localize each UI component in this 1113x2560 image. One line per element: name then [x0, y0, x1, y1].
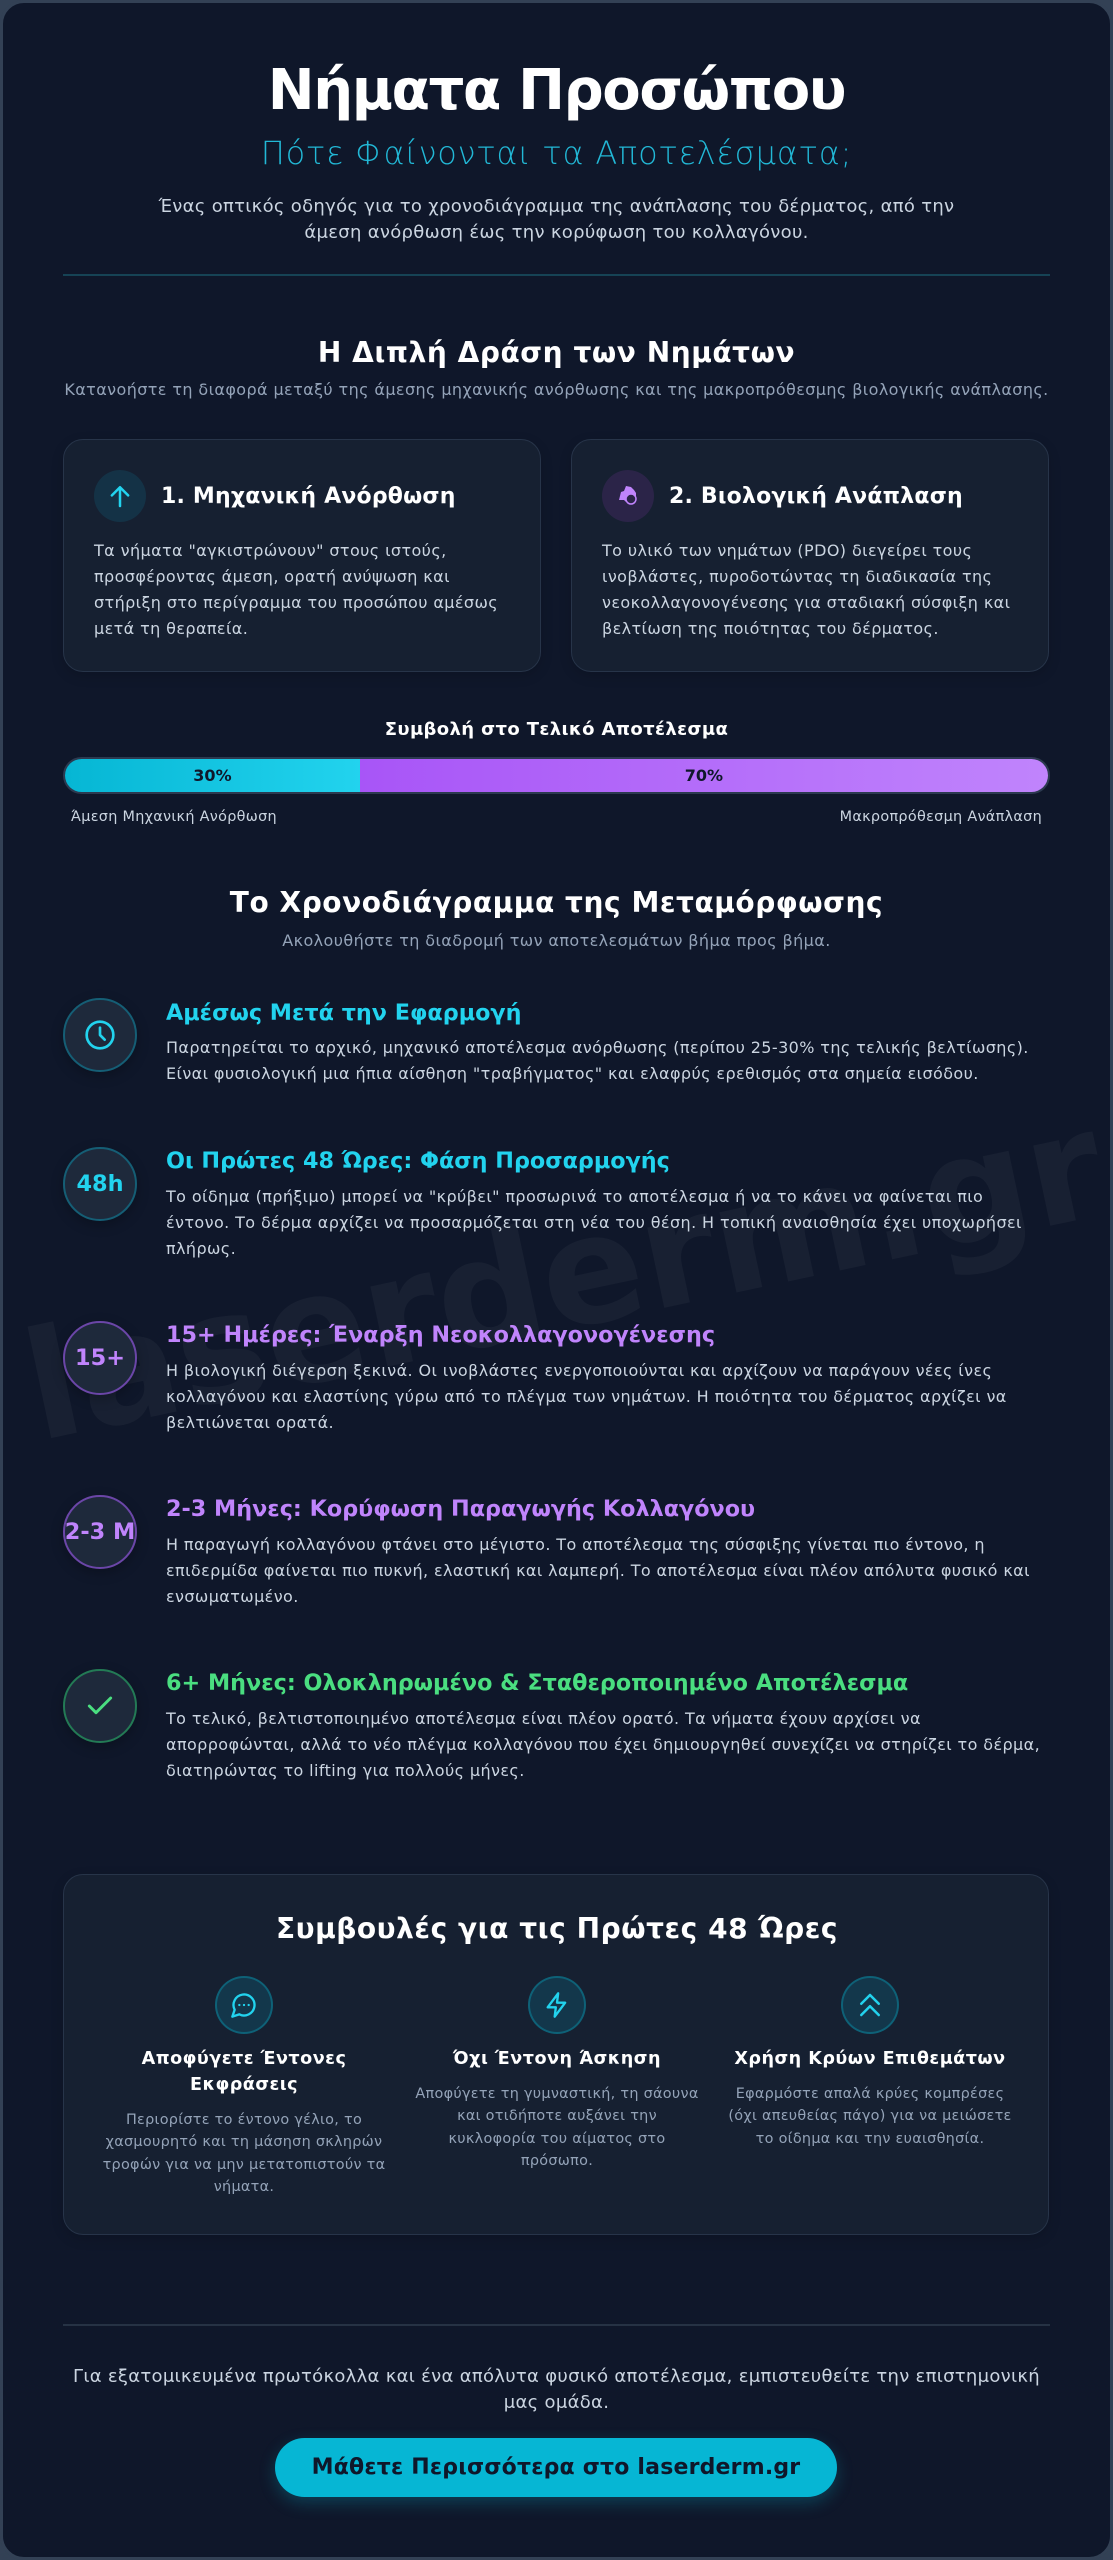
- card text: βελτίωση της ποιότητας του δέρματος.: [602, 619, 939, 638]
- timeline step: immediately: [63, 998, 1029, 1083]
- card text: ινοβλάστες, πυροδοτώντας τη διαδικασία της: [602, 567, 992, 586]
- watermark: laserderm.gr: [10, 1078, 1113, 1476]
- step text: κολλαγόνου και ελαστίνης γύρω από το πλέγμα των νημάτων. Η ποιότητα του δέρματος αρχίζει να: [166, 1387, 1007, 1406]
- section subtitle: Ακολουθήστε τη διαδρομή των αποτελεσμάτων βήμα προς βήμα.: [282, 931, 831, 950]
- step text: διατηρώντας το lifting για πολλούς μήνες.: [166, 1761, 525, 1780]
- tip: cold compress: [728, 1976, 1012, 2147]
- segment: 30%: [65, 759, 360, 792]
- marker: 48h: [63, 1147, 137, 1221]
- call to action button: Μάθετε Περισσότερα στο laserderm.gr: [312, 2455, 800, 2480]
- section heading: dual action: [64, 336, 1049, 399]
- card text: προσφέροντας άμεση, ορατή ανύψωση και: [94, 567, 450, 586]
- card text: [94, 541, 498, 638]
- tip text: [415, 2086, 699, 2169]
- step text: απορροφώνται, αλλά το νέο πλέγμα κολλαγόνου που έχει δημιουργηθεί συνεχίζει να στηρίζει το δέρμα,: [166, 1735, 1040, 1754]
- footer: [73, 2366, 1040, 2509]
- icon: double chevron: [841, 1976, 899, 2034]
- call to action button: [275, 2438, 837, 2497]
- step text: Το τελικό, βελτιστοποιημένο αποτέλεσμα είναι πλέον ορατό. Τα νήματα έχουν αρχίσει να: [166, 1709, 921, 1728]
- tip text: (όχι απευθείας πάγο) για να μειώσετε: [728, 2108, 1012, 2124]
- tip title: Χρήση Κρύων Επιθεμάτων: [734, 2049, 1006, 2069]
- bar label right: Μακροπρόθεσμη Ανάπλαση: [840, 809, 1042, 825]
- tip title: Όχι Έντονη Άσκηση: [453, 2049, 661, 2069]
- segment: 70%: 70%: [685, 766, 723, 785]
- tip: expressions: [103, 1976, 385, 2195]
- tip text: νήματα.: [214, 2179, 274, 2195]
- timeline step: 48 hours: [63, 1147, 1022, 1258]
- step text: ενσωματωμένο.: [166, 1587, 299, 1606]
- step text: Η παραγωγή κολλαγόνου φτάνει στο μέγιστο. Το αποτέλεσμα της σύσφιξης γίνεται πιο έντονο, η: [166, 1535, 985, 1554]
- tip text: πρόσωπο.: [521, 2153, 593, 2169]
- segment: 70%: [360, 759, 1048, 792]
- tips heading: Συμβουλές για τις Πρώτες 48 Ώρες: [276, 1912, 838, 1945]
- heading: Το Χρονοδιάγραμμα της Μεταμόρφωσης: [230, 886, 883, 919]
- step text: Είναι φυσιολογική μια ήπια αίσθηση "τραβήγματος" και ελαφρύς ερεθισμός στα σημεία εισόδου.: [166, 1064, 979, 1083]
- step text: [166, 1535, 1030, 1606]
- tip text: τροφών για να μην μετατοπιστούν τα: [103, 2157, 385, 2173]
- footer text: [73, 2366, 1040, 2413]
- panel: biological regeneration: [571, 439, 1049, 672]
- step text: [166, 1361, 1007, 1432]
- icon: regeneration blob: [602, 470, 654, 522]
- tip text: Περιορίστε το έντονο γέλιο, το: [126, 2112, 362, 2128]
- section heading: timeline: [230, 886, 883, 950]
- subtitle: Πότε Φαίνονται τα Αποτελέσματα;: [261, 134, 852, 172]
- section subtitle: Κατανοήστε τη διαφορά μεταξύ της άμεσης μηχανικής ανόρθωσης και της μακροπρόθεσμης βιολογικής ανάπλασης.: [64, 380, 1049, 399]
- icon: lightning: [528, 1976, 586, 2034]
- card text: [602, 541, 1010, 638]
- card text: μετά τη θεραπεία.: [94, 619, 248, 638]
- timeline step: 2-3 months: [63, 1495, 1030, 1606]
- step text: [166, 1038, 1029, 1083]
- header description: Ένας οπτικός οδηγός για το χρονοδιάγραμμα της ανάπλασης του δέρματος, από την: [159, 196, 954, 217]
- stacked bar: [63, 757, 1050, 794]
- step text: [166, 1187, 1022, 1258]
- step title: 2-3 Μήνες: Κορύφωση Παραγωγής Κολλαγόνου: [166, 1496, 755, 1522]
- header: [158, 58, 954, 243]
- segment: 30%: 30%: [193, 766, 232, 785]
- timeline step: 6+ months: [63, 1669, 1040, 1780]
- tip title: Εκφράσεις: [190, 2075, 298, 2095]
- tip text: το οίδημα και την ευαισθησία.: [756, 2131, 984, 2147]
- tip text: και οτιδήποτε αυξάνει την: [457, 2108, 657, 2124]
- marker: clock: [63, 998, 137, 1072]
- icon: speech bubble: [215, 1976, 273, 2034]
- step title: 15+ Ημέρες: Έναρξη Νεοκολλαγονογένεσης: [166, 1322, 715, 1348]
- tip title: [142, 2049, 346, 2095]
- step text: Η βιολογική διέγερση ξεκινά. Οι ινοβλάστες ενεργοποιούνται και αρχίζουν να παράγουν νέες ίνες: [166, 1361, 992, 1380]
- marker: 2-3 M: [63, 1495, 137, 1569]
- step title: Οι Πρώτες 48 Ώρες: Φάση Προσαρμογής: [166, 1148, 670, 1174]
- card text: νεοκολλαγονογένεσης για σταδιακή σύσφιξη και: [602, 593, 1010, 612]
- marker: 2-3 M: 2-3 M: [65, 1519, 135, 1545]
- step text: Το οίδημα (πρήξιμο) μπορεί να "κρύβει" προσωρινά το αποτέλεσμα ή να το κάνει να φαίνεται πιο: [166, 1187, 983, 1206]
- marker: 15+: 15+: [75, 1345, 125, 1371]
- bar label left: Άμεση Μηχανική Ανόρθωση: [71, 809, 277, 825]
- tip: exercise: [415, 1976, 699, 2169]
- tip text: Εφαρμόστε απαλά κρύες κομπρέσες: [736, 2086, 1004, 2102]
- step text: επιδερμίδα φαίνεται πιο πυκνή, ελαστική και λαμπερή. Το αποτέλεσμα είναι πλέον απόλυτα φυσικό και: [166, 1561, 1030, 1580]
- footer text: Για εξατομικευμένα πρωτόκολλα και ένα απόλυτα φυσικό αποτέλεσμα, εμπιστευθείτε την επιστημονική: [73, 2366, 1040, 2387]
- step text: πλήρως.: [166, 1239, 236, 1258]
- card title: 2. Βιολογική Ανάπλαση: [669, 484, 963, 509]
- marker: 15+: [63, 1321, 137, 1395]
- step title: 6+ Μήνες: Ολοκληρωμένο & Σταθεροποιημένο Αποτέλεσμα: [166, 1670, 908, 1696]
- header description: [158, 196, 954, 243]
- tip text: [103, 2112, 385, 2195]
- card text: Τα νήματα "αγκιστρώνουν" στους ιστούς,: [94, 541, 447, 560]
- chart title: Συμβολή στο Τελικό Αποτέλεσμα: [385, 719, 728, 740]
- icon: up arrow: [94, 470, 146, 522]
- tip title: Αποφύγετε Έντονες: [142, 2049, 346, 2069]
- step text: βελτιώνεται ορατά.: [166, 1413, 334, 1432]
- panel: mechanical lifting: [63, 439, 541, 672]
- tip text: κυκλοφορία του αίματος στο: [449, 2131, 665, 2147]
- step title: Αμέσως Μετά την Εφαρμογή: [166, 1000, 522, 1026]
- step text: [166, 1709, 1040, 1780]
- footer text: μας ομάδα.: [504, 2392, 609, 2413]
- heading: Η Διπλή Δράση των Νημάτων: [318, 336, 795, 369]
- card text: στήριξη στο περίγραμμα του προσώπου αμέσως: [94, 593, 498, 612]
- marker: 48h: 48h: [76, 1171, 124, 1197]
- timeline step: 15+ days: [63, 1321, 1007, 1432]
- card text: Το υλικό των νημάτων (PDO) διεγείρει τους: [602, 541, 972, 560]
- tip text: Αποφύγετε τη γυμναστική, τη σάουνα: [415, 2086, 699, 2102]
- panel: tips: [63, 1874, 1049, 2235]
- tip text: [728, 2086, 1012, 2147]
- tip text: χασμουρητό και τη μάσηση σκληρών: [106, 2134, 382, 2150]
- marker: check: [63, 1669, 137, 1743]
- contribution chart: [63, 719, 1050, 825]
- title: Νήματα Προσώπου: [268, 58, 845, 123]
- header description: άμεση ανόρθωση έως την κορύφωση του κολλαγόνου.: [304, 222, 809, 243]
- card title: 1. Μηχανική Ανόρθωση: [161, 484, 456, 509]
- step text: έντονο. Το δέρμα αρχίζει να προσαρμόζεται στη νέα του θέση. Η τοπική αναισθησία έχει υποχωρήσει: [166, 1213, 1022, 1232]
- step text: Παρατηρείται το αρχικό, μηχανικό αποτέλεσμα ανόρθωσης (περίπου 25-30% της τελικής βελτίωσης).: [166, 1038, 1029, 1057]
